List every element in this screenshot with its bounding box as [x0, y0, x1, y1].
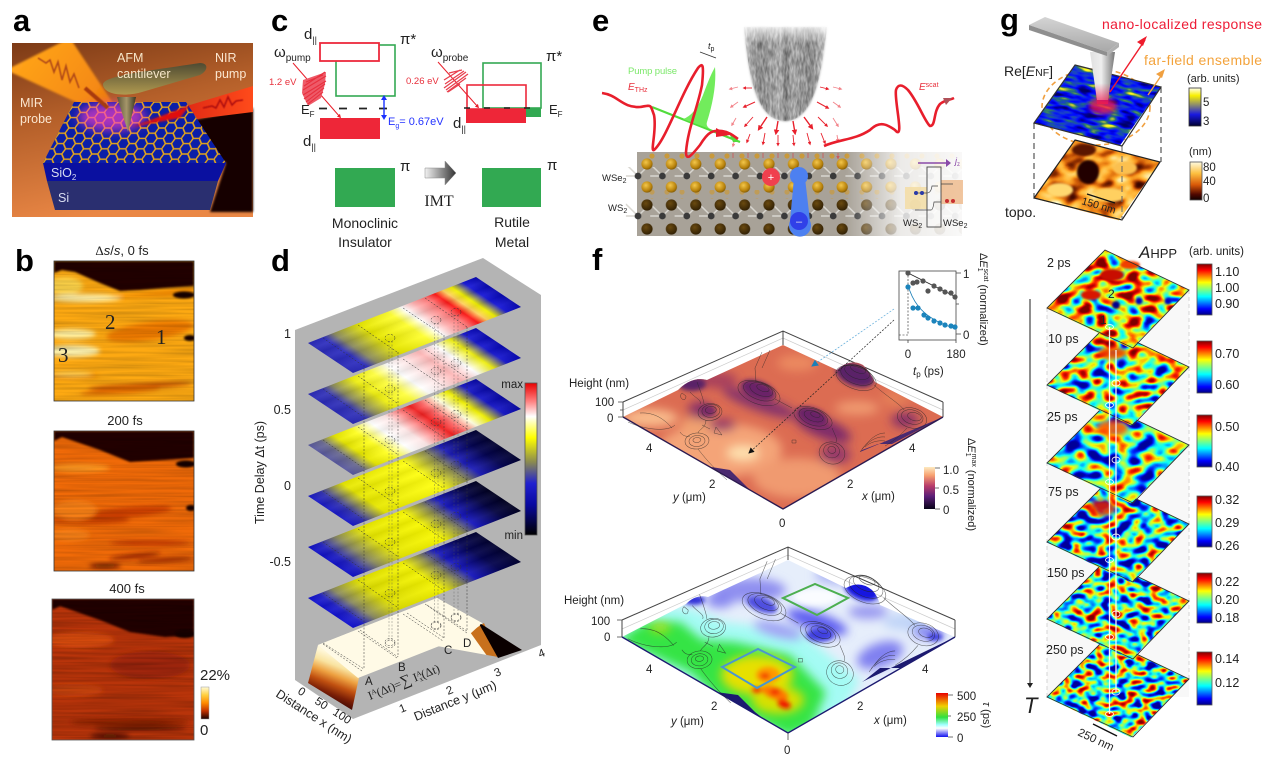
- probe wave and arrow: [438, 62, 478, 107]
- dark shadow region: [170, 108, 253, 212]
- colour bar values: 0.40: [1215, 460, 1239, 474]
- time axis labels: 1: [284, 327, 291, 341]
- E_scat red waveform: [824, 86, 954, 146]
- time labels: 250 ps: [1046, 643, 1084, 657]
- cantilever and tip: [1029, 17, 1119, 104]
- time axis labels: 0.5: [274, 403, 291, 417]
- waveform labels: E: [628, 82, 635, 93]
- colour bar values: 0.29: [1215, 516, 1239, 530]
- colour bar title: 1: [964, 453, 971, 457]
- panel label a: a: [13, 3, 31, 38]
- axis labels, lower: 0: [784, 745, 790, 757]
- map 400 fs: [52, 599, 194, 740]
- point labels 1 and 2: 2: [1108, 287, 1115, 301]
- inset y title: scat: [982, 269, 989, 282]
- point labels A B C D: B: [398, 662, 406, 674]
- grey backdrop: [295, 258, 541, 719]
- green region box: [783, 584, 848, 615]
- colour bar near-field: [1187, 73, 1240, 128]
- colour bar title: (normalized): [965, 467, 977, 531]
- formula: A: [370, 687, 378, 697]
- time arrow: [1029, 299, 1031, 683]
- colour bar values: 0.14: [1215, 652, 1239, 666]
- colour bar magma: 1.0: [943, 465, 959, 477]
- green pump pulse: [652, 67, 740, 142]
- heatmap 250 ps: [1047, 639, 1189, 737]
- formula: (Δt): [419, 661, 442, 681]
- callout far-field ensemble: far-field ensemble: [1144, 52, 1262, 68]
- point labels A B C D: D: [463, 638, 471, 650]
- insulator bands: [319, 43, 399, 207]
- colour bar 22%: 22%: [200, 667, 230, 684]
- inset band alignment: WSe: [943, 218, 964, 229]
- layer labels: WS: [608, 203, 623, 214]
- orange arrow: [1148, 73, 1163, 95]
- panel label d: d: [271, 243, 290, 278]
- labels on scene: NIR: [215, 51, 237, 65]
- scale bar 150 nm: 150 nm: [1080, 195, 1117, 217]
- panel label b: b: [15, 243, 34, 278]
- colour bar height: 0: [1203, 193, 1209, 205]
- colour bar magma: 0: [943, 505, 949, 517]
- point labels A B C D: C: [444, 645, 452, 657]
- band labels, insulator: π: [400, 158, 410, 175]
- axis y ticks and title: [398, 647, 548, 724]
- heatmap 25 ps: [1047, 405, 1189, 503]
- axis labels, upper: y (μm): [672, 492, 706, 504]
- height axis, upper: 0: [607, 413, 613, 425]
- field arrows: [730, 87, 841, 158]
- band labels, insulator: pump: [286, 53, 311, 64]
- time labels: 2 ps: [1047, 256, 1071, 270]
- formula: I: [366, 688, 375, 703]
- map frame 200 fs: [54, 431, 194, 571]
- integrated intensity base: [308, 598, 522, 710]
- upper map edge: [623, 417, 943, 509]
- point labels A B C D: [365, 638, 471, 688]
- height axis, lower: [564, 595, 624, 644]
- band gap arrow: [383, 97, 385, 118]
- axis x ticks and title: Distance x (nm): [273, 687, 354, 746]
- waveform labels: [628, 41, 939, 94]
- band labels, insulator: F: [310, 110, 315, 119]
- axis labels, upper: 2: [709, 479, 715, 491]
- axis labels, upper: x (μm): [861, 491, 895, 503]
- projection dashed lines: [1034, 87, 1161, 220]
- axis labels, lower: 4: [646, 664, 653, 676]
- caption monoclinic insulator: Monoclinic: [332, 215, 398, 231]
- decay inset chart: p: [916, 370, 921, 379]
- axis labels, upper: 2: [847, 479, 853, 491]
- band labels, insulator: π*: [400, 31, 416, 48]
- colour bar magma: 0.5: [943, 485, 959, 497]
- lower lifetime map: [622, 560, 955, 732]
- inset band alignment: [903, 156, 968, 230]
- region numbers: 2: [105, 310, 116, 334]
- formula: x: [418, 675, 425, 684]
- height axis, upper: 100: [595, 397, 614, 409]
- axis x ticks and title: 100: [330, 706, 353, 727]
- time labels: 10 ps: [1048, 332, 1079, 346]
- heatmap 150 ps: [1047, 561, 1189, 659]
- colour bar near-field: 3: [1203, 116, 1209, 128]
- axis labels, upper: [646, 443, 916, 530]
- slab -0.5 region stack from bottom to top: [308, 277, 522, 710]
- region numbers: 3: [58, 343, 68, 367]
- colour bar values: 0.18: [1215, 611, 1239, 625]
- panel label e: e: [592, 3, 609, 38]
- heatmap 2 ps: [1047, 250, 1189, 348]
- band labels, insulator: E: [301, 102, 310, 117]
- inset band alignment: 2: [918, 223, 922, 230]
- colour bar values: 0.50: [1215, 420, 1239, 434]
- colour bar magma: [924, 465, 959, 517]
- panel d: time-delay stack: [253, 243, 548, 746]
- caption rutile metal: Metal: [495, 234, 529, 250]
- band gap arrowheads: [381, 95, 387, 120]
- substrate stack: [43, 102, 226, 210]
- time labels: 25 ps: [1047, 410, 1078, 424]
- panel e: THz nano-probing of heterostructure: [592, 3, 968, 241]
- red hot spot: [1089, 98, 1117, 114]
- MIR probe beam: [12, 43, 113, 102]
- IMT arrow: IMT: [424, 193, 454, 210]
- orange arrowhead: [1156, 69, 1165, 78]
- lower map edge: [622, 637, 955, 733]
- band labels, insulator: d: [303, 133, 311, 150]
- red arrow: [1110, 40, 1145, 92]
- lower map box walls: [622, 547, 955, 637]
- caption monoclinic insulator: Insulator: [338, 234, 392, 250]
- region numbers: [58, 310, 166, 367]
- colour bar 22%: [200, 667, 230, 739]
- label Re[E_NF]: Re[ENF]: [1004, 63, 1053, 79]
- E_THz red waveform: [602, 65, 738, 157]
- map 200 fs: [54, 431, 194, 571]
- inset band alignment: z: [957, 162, 960, 168]
- heading 0 fs: Δs/s, 0 fs: [95, 243, 149, 258]
- axis y ticks and title: 3: [493, 666, 503, 680]
- layer labels: [602, 173, 627, 215]
- colour bar values: 0.22: [1215, 575, 1239, 589]
- point labels 1 and 2: [1100, 287, 1115, 327]
- band labels, metal: π*: [546, 48, 562, 65]
- colour bar lifetime: 500: [957, 691, 976, 703]
- electron-hole pair: [762, 167, 811, 237]
- height axis, upper: Height (nm): [569, 378, 629, 390]
- time axis title: Time Delay Δt (ps): [253, 421, 267, 524]
- waveform labels: scat: [926, 82, 939, 89]
- colour bar max/min: [501, 379, 537, 542]
- metal tip: [744, 26, 827, 122]
- lifetime title: τ (ps): [980, 702, 992, 728]
- inset band alignment: WS: [903, 218, 918, 229]
- upper map contours: [628, 350, 929, 480]
- band labels, insulator: g: [395, 123, 399, 130]
- colour bar values: 1.00: [1215, 281, 1239, 295]
- colour bar lifetime: 250: [957, 712, 976, 724]
- pulse waves: [38, 58, 243, 108]
- metal bands: [464, 63, 543, 207]
- red beam focus on sample: [132, 105, 190, 127]
- blue region box: [722, 649, 795, 688]
- inset pointer lines and arrows: [749, 309, 894, 453]
- axis labels, lower: y (μm): [670, 716, 704, 728]
- band labels, insulator: ||: [312, 35, 317, 45]
- band labels, insulator: = 0.67eV: [399, 116, 444, 128]
- axis y ticks and title: 2: [445, 684, 455, 698]
- map frame 0 fs: [54, 261, 194, 401]
- waveform labels: Pump pulse: [628, 66, 677, 77]
- inset y title: Δ E: [977, 253, 989, 268]
- band labels, insulator: E: [388, 116, 395, 128]
- formula: A: [415, 669, 423, 678]
- colour bar max/min: max: [501, 379, 523, 391]
- band labels, metal: probe: [443, 53, 469, 64]
- heatmap 10 ps: [1047, 327, 1189, 425]
- scat arrowhead: [943, 98, 952, 105]
- region numbers: 1: [156, 325, 166, 349]
- colour bar values: 1.10: [1215, 265, 1239, 279]
- layer labels: 2: [623, 178, 627, 185]
- decay inset chart: (ps): [921, 366, 944, 378]
- colour bar values: 0.70: [1215, 347, 1239, 361]
- inset y title: 1: [976, 268, 983, 272]
- decay inset chart: [899, 269, 969, 379]
- labels on scene: cantilever: [117, 67, 170, 81]
- callout nano-localized response: nano-localized response: [1102, 16, 1262, 32]
- panel c: VO2 band diagram: [269, 3, 563, 250]
- decay inset chart: 0: [963, 330, 969, 342]
- electron-hole pair: –: [796, 216, 803, 228]
- time axis labels: -0.5: [269, 555, 291, 569]
- lower map contours: [628, 559, 941, 703]
- formula: (Δt)=: [374, 677, 404, 699]
- colour bar 22%: 0: [200, 722, 208, 739]
- labels on scene: AFM: [117, 51, 143, 65]
- colour bar lifetime: [936, 691, 976, 745]
- time arrowhead: [1027, 683, 1033, 688]
- caption rutile metal: Rutile: [494, 214, 530, 230]
- axis y ticks and title: Distance y (μm): [412, 678, 499, 724]
- band labels, metal: F: [558, 110, 563, 119]
- band labels, insulator: 1.2 eV: [269, 77, 297, 88]
- colour bar height: (nm): [1189, 146, 1212, 158]
- axis y ticks and title: 4: [537, 647, 548, 661]
- guide dashed lines: [323, 315, 467, 669]
- axis y ticks and title: 1: [398, 702, 408, 716]
- labels on scene: probe: [20, 112, 52, 126]
- colour bar max/min: min: [504, 530, 523, 542]
- band labels, metal: ω: [431, 44, 443, 61]
- axis labels, upper: 4: [646, 443, 653, 455]
- axis labels, lower: x (μm): [873, 715, 907, 727]
- band labels, metal: [406, 44, 563, 174]
- colour bar values: 0.20: [1215, 593, 1239, 607]
- heading 400 fs: 400 fs: [109, 581, 145, 596]
- NIR pump beam: [132, 86, 253, 127]
- colour bar height: 40: [1203, 176, 1216, 188]
- colour bar values: 0.90: [1215, 297, 1239, 311]
- colour bar near-field: 5: [1203, 97, 1209, 109]
- panel label f: f: [592, 242, 603, 277]
- decay inset chart: 1: [963, 269, 969, 281]
- heading 200 fs: 200 fs: [107, 413, 143, 428]
- IMT arrow: [424, 161, 456, 210]
- labels on scene: Si: [58, 191, 69, 205]
- point labels A B C D: A: [365, 676, 373, 688]
- band labels, insulator: d: [304, 26, 312, 43]
- colour bar values: 0.12: [1215, 676, 1239, 690]
- height axis, lower: 100: [591, 616, 610, 628]
- colour bar title: max: [970, 454, 977, 467]
- band labels, insulator: [269, 26, 444, 175]
- waveform labels: p: [711, 46, 715, 53]
- vertical white tracking lines: [1106, 324, 1120, 716]
- colour bar values: 0.32: [1215, 493, 1239, 507]
- panel f: 3D nano-maps: [564, 242, 992, 757]
- layer labels: 2: [623, 208, 627, 215]
- time labels: 150 ps: [1047, 566, 1085, 580]
- labels on scene: [20, 51, 246, 205]
- near-field map: [1034, 65, 1161, 146]
- labels on scene: SiO: [51, 166, 72, 180]
- axis labels, lower: 4: [922, 664, 929, 676]
- upper map box walls: [623, 331, 943, 417]
- stack side guides: [1047, 290, 1189, 697]
- band labels, metal: E: [549, 102, 558, 117]
- axis labels, upper: 0: [779, 518, 785, 530]
- waveform labels: E: [919, 82, 926, 93]
- band labels, metal: 0.26 eV: [406, 76, 439, 87]
- time labels: [1046, 256, 1085, 657]
- axis x ticks and title: 50: [312, 695, 330, 712]
- panel g: polariton nano-imaging: [1000, 2, 1262, 754]
- time axis labels: 0: [284, 479, 291, 493]
- near-field glow: [78, 103, 146, 131]
- map frame 400 fs: [52, 599, 194, 740]
- colour bar title: Δ E: [965, 438, 977, 453]
- heading A_HPP: AHPP: [1138, 243, 1177, 262]
- colour bar values: 0.26: [1215, 539, 1239, 553]
- panel label c: c: [271, 3, 288, 38]
- colour bar height: [1189, 146, 1216, 205]
- upper amplitude map: [623, 345, 943, 508]
- colour bar height: 80: [1203, 162, 1216, 174]
- axis x ticks and title: 0: [295, 685, 307, 699]
- colour bar near-field: (arb. units): [1187, 73, 1240, 85]
- band labels, insulator: ||: [311, 142, 316, 152]
- labels on scene: MIR: [20, 96, 43, 110]
- band labels, metal: π: [547, 157, 557, 174]
- labels on scene: 2: [72, 173, 77, 182]
- scale bar 250 nm: 250 nm: [1076, 727, 1116, 754]
- decay inset chart: 180: [946, 349, 966, 361]
- heatmap 75 ps: [1047, 484, 1189, 582]
- height axis, lower: 0: [604, 632, 610, 644]
- layer labels: WSe: [602, 173, 623, 184]
- label topo: topo.: [1005, 204, 1036, 220]
- caption rutile metal: [494, 214, 530, 250]
- time labels: 75 ps: [1048, 485, 1079, 499]
- red arrowhead: [1137, 36, 1147, 46]
- waveform labels: THz: [635, 87, 648, 94]
- pulse head: [716, 128, 730, 137]
- colour bar lifetime: 0: [957, 733, 963, 745]
- formula: ∑ I: [398, 670, 420, 691]
- axis labels, lower: [646, 664, 929, 757]
- topography map: [1034, 140, 1160, 220]
- axis labels, lower: 2: [711, 701, 717, 713]
- far-field dashed ring: [1042, 69, 1150, 145]
- scene background: [12, 43, 253, 217]
- band labels, metal: d: [453, 115, 461, 132]
- height axis, upper: [569, 378, 629, 425]
- AFM cantilever: [103, 63, 206, 132]
- lattice: [626, 152, 962, 241]
- panel b: pump-probe time series: [15, 243, 230, 740]
- band labels, metal: ||: [461, 124, 466, 134]
- pump wave and arrow: [293, 63, 340, 117]
- caption monoclinic insulator: [332, 215, 398, 250]
- inset band alignment: 2: [964, 223, 968, 230]
- panel a: graphene nano-imaging setup: [6, 3, 253, 217]
- map 0 fs: [54, 261, 194, 401]
- axis labels, lower: 2: [857, 701, 863, 713]
- labels on scene: pump: [215, 67, 246, 81]
- height axis, lower: Height (nm): [564, 595, 624, 607]
- colour bar values: [1215, 265, 1239, 690]
- panel label g: g: [1000, 2, 1019, 37]
- decay inset chart: t: [913, 366, 917, 378]
- units label: (arb. units): [1189, 246, 1244, 258]
- waveform labels: t: [708, 41, 711, 51]
- decay inset chart: 0: [905, 349, 911, 361]
- time axis labels: [269, 327, 291, 569]
- electron-hole pair: +: [768, 172, 774, 184]
- time symbol T: T: [1024, 693, 1039, 718]
- inset band alignment: j: [955, 156, 957, 166]
- band labels, insulator: ω: [274, 44, 286, 61]
- jet colour bars: [1197, 264, 1212, 705]
- point labels 1 and 2: 1: [1100, 313, 1107, 327]
- colour bar values: 0.60: [1215, 378, 1239, 392]
- inset y title: (normalized): [977, 281, 989, 346]
- axis labels, upper: 4: [909, 443, 916, 455]
